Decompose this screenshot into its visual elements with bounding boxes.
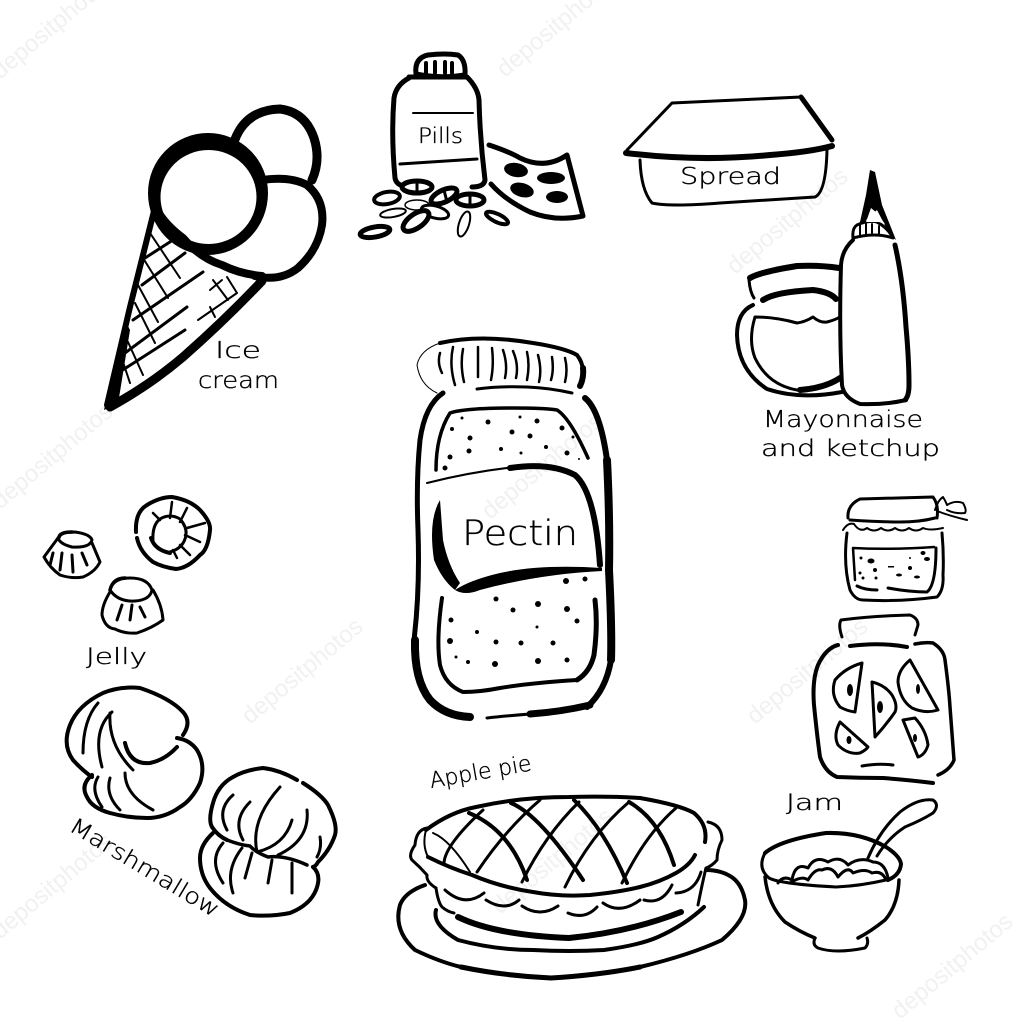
icon: central pectin jar (414, 338, 611, 718)
icon: small jam jar with cloth lid (843, 497, 967, 601)
label: jelly: Jelly (86, 645, 147, 670)
jar body outline (414, 393, 611, 718)
text: depositphotos (722, 163, 853, 280)
icon: jar of apple slices (814, 615, 954, 783)
label: mayonnaise and ketchup: Mayonnaise (763, 407, 923, 433)
label: mayonnaise and ketchup: and ketchup (761, 436, 940, 462)
label: jam: Jam (786, 791, 843, 816)
text: depositphotos (887, 908, 1018, 1024)
label: ice cream: cream (198, 368, 279, 394)
text: depositphotos (742, 613, 873, 730)
text: depositphotos (237, 613, 368, 730)
label: marshmallow: Marshmallow (65, 814, 224, 923)
icon: spread tub (626, 97, 832, 205)
icon: jam bowl with spoon (762, 791, 936, 951)
label: pills: Pills (418, 124, 463, 148)
icon: ice cream cone (104, 109, 322, 410)
icon: apple pie (398, 751, 745, 978)
label: ice cream (198, 338, 279, 394)
label: spread: Spread (680, 164, 781, 190)
icon: jelly candies (44, 497, 210, 670)
label: mayonnaise and ketchup (761, 407, 940, 462)
icon: mayonnaise jar and ketchup bottle (737, 170, 940, 462)
icon: marshmallows (65, 688, 336, 923)
text: depositphotos (487, 803, 618, 920)
icon: pills bottle, blister and loose pills (359, 54, 583, 240)
label: ice cream: Ice (215, 338, 261, 364)
label: apple pie: Apple pie (428, 751, 533, 794)
label: pectin: Pectin (462, 514, 578, 554)
text: depositphotos (477, 408, 608, 525)
